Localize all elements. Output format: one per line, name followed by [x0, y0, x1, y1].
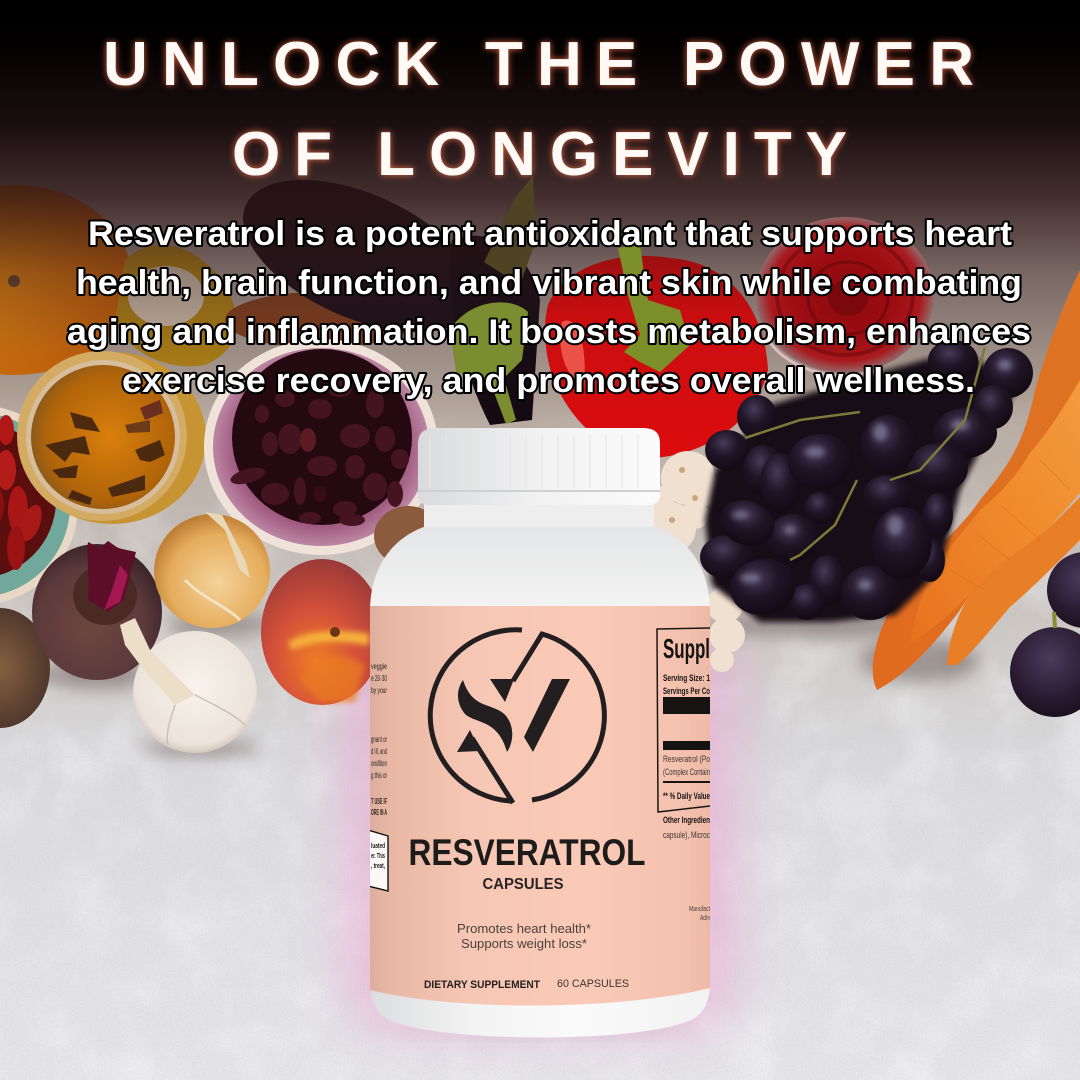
- food: grapes: [700, 340, 1033, 622]
- side directions text: ondition: [371, 759, 387, 768]
- food: walnut: [374, 506, 442, 566]
- benefits: Promotes heart health*: [457, 922, 591, 936]
- FDA disclaimer box: luated: [371, 841, 385, 850]
- food: beet: [32, 541, 162, 680]
- food: wooden board: [225, 292, 415, 348]
- supplement facts panel: Adm: [700, 915, 710, 922]
- bottle cap: [418, 428, 660, 505]
- food: peach: [261, 559, 383, 705]
- supplement facts panel: Serving Size: 1: [663, 673, 710, 684]
- bottle: [368, 428, 710, 1038]
- bottle shadow: [380, 1022, 700, 1038]
- logo: [430, 630, 604, 803]
- soft shadows under foods: [30, 613, 980, 757]
- dietary supplement line: [424, 978, 629, 991]
- bottle shoulder: [370, 525, 710, 612]
- bottle body: [370, 525, 710, 1038]
- title: UNLOCK THE POWER: [103, 30, 974, 99]
- raisins: [229, 381, 409, 526]
- food: eggplant: [221, 149, 540, 425]
- benefits: [457, 922, 591, 951]
- grape stems: [745, 347, 985, 560]
- title: OF LONGEVITY: [232, 120, 847, 189]
- bottle neck: [424, 503, 654, 527]
- side directions text: gnant or: [371, 735, 387, 744]
- label: [370, 606, 710, 1006]
- pink glow behind bottle: [345, 620, 735, 1030]
- side directions text: d III, and: [371, 747, 387, 756]
- bottle: T USE IF: [371, 797, 387, 806]
- FDA disclaimer box: er. This: [371, 851, 385, 860]
- food: oil bottle: [115, 245, 237, 366]
- supplement facts panel: ** % Daily Value: [663, 791, 710, 802]
- dietary supplement line: DIETARY SUPPLEMENT: [424, 979, 540, 991]
- description paragraph: Resveratrol is a potent antioxidant that supports heart: [88, 215, 1012, 253]
- top dark gradient overlay: [0, 0, 1080, 420]
- supplement facts panel: capsule), Microc: [663, 830, 710, 841]
- food: garlic: [120, 618, 257, 753]
- description paragraph: [67, 215, 1031, 400]
- food: onion: [154, 512, 270, 628]
- bottle: ORE IN A: [371, 808, 387, 817]
- supplement facts panel: (Complex Contain: [663, 767, 710, 778]
- side directions text: [371, 662, 387, 817]
- food: wine glass: [756, 217, 934, 376]
- description paragraph: health, brain function, and vibrant skin while combating: [76, 264, 1022, 302]
- food: carrots: [873, 270, 1080, 690]
- food: raisin bowl: [204, 339, 438, 555]
- supplement facts panel: Resveratrol (Po: [663, 754, 710, 765]
- food: tea glass: [17, 351, 206, 524]
- side directions text: g this or: [371, 771, 387, 780]
- FDA disclaimer box: [368, 830, 388, 891]
- capsules subtitle: CAPSULES: [482, 876, 564, 893]
- side directions text: e 20-30: [371, 674, 387, 683]
- food: left beet: [0, 608, 50, 728]
- product name: RESVERATROL: [408, 832, 646, 873]
- supplement facts panel: Manufact: [689, 906, 710, 913]
- grape highlights: [732, 360, 1012, 590]
- supplement facts panel: Suppl: [663, 633, 710, 664]
- side directions text: veggie: [371, 662, 387, 671]
- food: eggplant stems: [450, 176, 536, 424]
- supplement facts panel: Servings Per Co: [663, 686, 710, 697]
- supplement facts panel: [657, 628, 710, 922]
- description paragraph: exercise recovery, and promotes overall wellness.: [122, 362, 975, 400]
- supplement facts panel: Other Ingredien: [663, 815, 710, 826]
- benefits: Supports weight loss*: [461, 937, 587, 951]
- food: bean bowl: [0, 405, 78, 605]
- food: orange: [0, 185, 132, 375]
- food: cauliflower: [644, 451, 745, 672]
- food: red pepper: [545, 245, 768, 458]
- food: background items upper band: [0, 149, 540, 425]
- FDA disclaimer box: , treat,: [371, 861, 385, 870]
- title: [103, 30, 974, 189]
- food: plums: [1010, 552, 1080, 717]
- dietary supplement line: 60 CAPSULES: [557, 978, 629, 990]
- side directions text: by your: [371, 686, 387, 695]
- description paragraph: aging and inflammation. It boosts metabolism, enhances: [67, 313, 1031, 351]
